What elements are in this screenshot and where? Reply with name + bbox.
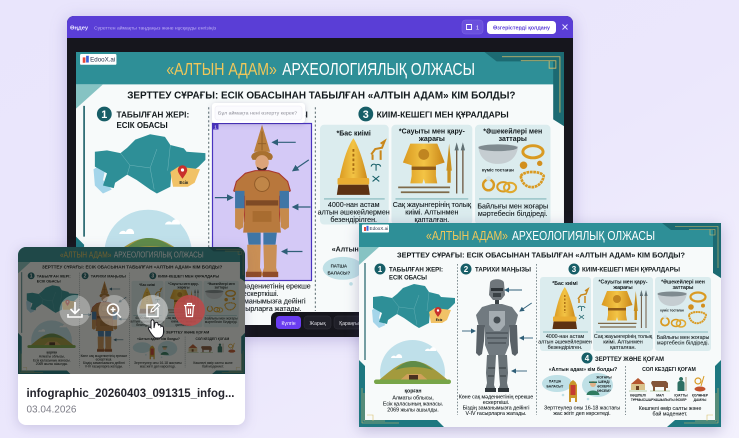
section 3: clothing cards: *Сауыты мен қару- (399, 129, 466, 136)
section 4: research and society: МАЛ (656, 394, 664, 398)
section 4: research and society (322, 246, 359, 286)
thumbnail image: Сақ жауынгерінің толық (165, 316, 202, 320)
icon: hand cursor (148, 320, 164, 338)
section 2: robot: ескерткіші. (483, 400, 509, 406)
panel: gallery card (18, 247, 245, 425)
section 3: clothing cards: қапталған. (610, 345, 636, 351)
editor header bar: Өзгерістерді қолдану (493, 26, 550, 32)
caption under warrior: V-IV ғасырларға жатады. (220, 305, 302, 313)
section 4: research and society: жас жігіт деп көрсетеді. (553, 411, 611, 417)
section 4: research and society: ЗЕРТТЕУ ЖӘНЕ ҚОҒАМ (394, 230, 487, 240)
section 2: robot: 2 (464, 265, 469, 274)
thumbnail image: жарағы (176, 285, 190, 289)
section 3: clothing cards: мәртебесін білдіреді. (657, 340, 709, 346)
editor header bar: Өңдеу (70, 26, 89, 32)
section 3: clothing cards: қапталған. (415, 216, 449, 224)
date: 03.04.2026 (26, 404, 77, 416)
section 2: robot: ТАРИХИ МАҢЫЗЫ (475, 266, 531, 274)
thumbnail image: ЕСІК ОБАСЫ (37, 278, 61, 283)
thumbnail image: V-IV ғасырларға жатады. (85, 364, 123, 368)
section 4: research and society: СОЛ КЕЗДЕГІ ҚОҒАМ (642, 367, 696, 373)
section 3: clothing cards: *Бас киімі (552, 281, 578, 287)
section 1: location: 2069 жылы ашылды. (387, 408, 439, 414)
section 1: location (372, 265, 455, 414)
section 4: research and society: «Алтын адам» кім болды? (549, 366, 617, 373)
section 2: warrior: 2 (217, 109, 223, 121)
research question: ЗЕРТТЕУ СҰРАҒЫ: ЕСІК ОБАСЫНАН ТАБЫЛҒАН «АЛТЫН АДАМ» КІМ БОЛДЫ? (127, 91, 515, 102)
caption under warrior (245, 282, 310, 312)
thumbnail image: қорған (46, 350, 57, 354)
section 3: clothing cards: безендірілген. (548, 345, 582, 351)
section 1: location: Есік (436, 318, 443, 322)
icon: delete (174, 295, 205, 326)
title: «АЛТЫН АДАМ» (166, 59, 277, 79)
section 3: clothing cards: Байлығы мен жоғары (657, 334, 709, 341)
section 3: clothing cards: КИІМ-КЕШЕГІ МЕН ҚҰРАЛДАРЫ (377, 109, 509, 119)
section 4: research and society: ЗЕРТТЕУ ЖӘНЕ ҚОҒАМ (595, 356, 664, 363)
thumbnail image: 3 (151, 274, 154, 280)
section 3: clothing cards: 3 (363, 109, 369, 121)
section 1: location: қорған (404, 388, 422, 394)
style button: dark (334, 316, 364, 329)
section 4: research and society: ТҰРМЫС (631, 398, 646, 402)
thumbnail image: Байлығы мен жоғары (205, 317, 238, 321)
icon: zoom (98, 295, 130, 326)
section 4: research and society: ӘСКЕРИ (597, 384, 611, 388)
caption under warrior: Біздің заманымызға дейінгі (216, 297, 306, 305)
section 3: clothing cards: *Әшекейлері мен (661, 278, 705, 286)
thumbnail image: «АЛТЫН АДАМ» (60, 251, 112, 260)
thumbnail image (18, 247, 245, 375)
thumbnail image: қапталған. (175, 323, 192, 327)
thumbnail image: Біздің заманымызға дейінгі (83, 361, 125, 365)
icon: download (60, 295, 90, 326)
infographic: main editor canvas (76, 52, 564, 327)
section 3: clothing cards: киімі. Алтынмен (405, 208, 459, 216)
section 1: location: ЕСІК ОБАСЫ (116, 120, 168, 130)
section 3: clothing cards: Сақ жауынгерінің толық (393, 201, 472, 209)
section 4: research and society: ШЕНДІ (598, 380, 610, 384)
thumbnail image: 2 (84, 274, 87, 280)
section 4: research and society: 4 (585, 354, 590, 363)
section 3: clothing cards: 4000-нан астам (546, 334, 585, 340)
section 2: robot (459, 265, 533, 417)
thumbnail image: киімі. Алтынмен (171, 320, 196, 324)
thumbnail image: 2069 жылы ашылды. (36, 362, 68, 366)
style button: light (304, 316, 331, 329)
section 2: robot: V-IV ғасырларға жатады. (466, 411, 526, 417)
thumbnail image: заттары (215, 285, 228, 289)
thumbnail image: *Сауыты мен қару- (168, 282, 199, 286)
section 3: clothing cards: 3 (572, 265, 577, 274)
section 4: research and society: ДАМУЫ (694, 398, 706, 402)
section 3: clothing cards: Байлығы мен жоғары (477, 202, 548, 210)
style toolbar (76, 312, 564, 337)
title: «АЛТЫН АДАМ» (426, 228, 508, 243)
section 3: clothing cards: алтын әшекейлермен (318, 208, 390, 216)
title (166, 63, 474, 78)
logo: EdooX.ai (370, 226, 388, 231)
section 1: location: Есік (179, 180, 189, 185)
section 1: location: 1 (378, 265, 383, 274)
thumbnail image: Көне сақ мәдениетінің ерекше (81, 354, 127, 358)
section 2: warrior (305, 112, 308, 118)
section 3: clothing cards: заттары (673, 285, 694, 291)
section 1: location (94, 110, 206, 247)
section 4: research and society: БАЛАСЫ? (547, 384, 563, 388)
logo: EdooX.ai (90, 57, 115, 64)
thumbnail image: ТАБЫЛҒАН ЖЕРІ: (37, 273, 71, 278)
section 2: robot: Көне сақ мәдениетінің ерекше (459, 394, 533, 400)
section 1: location: Алматы облысы, (392, 396, 434, 402)
infographic: result robot version (359, 223, 721, 427)
section 3: clothing cards: заттары (499, 136, 527, 143)
title (426, 228, 655, 243)
caption under warrior: ескерткіші. (243, 290, 279, 298)
thumbnail image: мәртебесін білдіреді. (205, 320, 237, 324)
thumbnail image: Көшпелі өмір салты және (193, 361, 233, 365)
section 3: clothing cards (318, 109, 548, 224)
section 3: clothing cards: мәртебесін білдіреді. (478, 210, 548, 218)
section 3: clothing cards (538, 265, 709, 351)
logo (80, 54, 116, 65)
style button: purple: Күлгін (281, 321, 296, 327)
thumbnail image: Зерттеулер оны 16-18 жастағы (134, 361, 182, 365)
thumbnail image: «Алтын адам» кім болды? (137, 337, 180, 341)
section 4: research and society: КӨШПЕЛІ (630, 394, 646, 398)
panel: editor window (67, 16, 573, 337)
section 3: clothing cards: КИІМ-КЕШЕГІ МЕН ҚҰРАЛДАРЫ (582, 266, 680, 274)
section 4: research and society: ПАТША (331, 264, 348, 269)
section 4: research and society: «Алтын адам» кім болды? (332, 246, 424, 254)
thumbnail image: безендірілген. (136, 323, 158, 327)
thumbnail image: СОЛ КЕЗДЕГІ ҚОҒАМ (196, 337, 229, 341)
section 3: clothing cards: 4000-нан астам (328, 201, 380, 209)
section 4: research and society: ҚУАТТЫ (674, 394, 688, 398)
section 3: clothing cards: *Сауыты мен қару- (599, 280, 648, 286)
section 4: research and society: Көшпелі өмір салты және (639, 406, 701, 412)
thumbnail image: 4000-нан астам (135, 316, 160, 320)
section 4: research and society: бай мәдениет. (653, 410, 687, 418)
editor header bar: Суреттен аймақты таңдаңыз және нұсқауды енгізіңіз (94, 24, 216, 30)
section 3: clothing cards: жарағы (612, 285, 633, 291)
logo (362, 224, 389, 232)
section 3: clothing cards: *Бас киімі (337, 130, 371, 138)
section 1: location: ЕСІК ОБАСЫ (389, 274, 427, 282)
thumbnail image: бай мәдениет. (202, 365, 224, 369)
icon: edit (137, 295, 168, 326)
editor header bar: 1 (476, 26, 479, 32)
thumbnail image: Есік қаласының жанасы. (33, 358, 71, 362)
file name: infographic_20260403_091315_infog... (26, 388, 234, 400)
selection region on the warrior: 1 (214, 124, 217, 130)
section 4: research and society: 4 (380, 229, 386, 241)
prompt popover (212, 103, 305, 123)
section 3: clothing cards: безендірілген. (330, 216, 377, 224)
section 3: clothing cards: күміс тостаған (482, 167, 514, 172)
thumbnail image: 4 (160, 330, 163, 336)
section 3: clothing cards: Сақ жауынгерінің толық (594, 334, 653, 340)
section 1: location: ТАБЫЛҒАН ЖЕРІ: (116, 109, 189, 119)
section 4: research and society: ӘСКЕР (675, 398, 687, 402)
section 4: research and society: ЖОҒАРЫ (595, 376, 612, 380)
section 4: research and society: ҚОЛӨНЕР (692, 394, 709, 398)
section 2: warrior: ТАРИХИ МАҢЫЗЫ (232, 109, 308, 119)
thumbnail image: КИІМ-КЕШЕГІ МЕН ҚҰРАЛДАРЫ (158, 273, 219, 278)
section 4: research and society: ПАТША (549, 380, 562, 384)
thumbnail image: Алматы облысы, (39, 355, 65, 359)
thumbnail image: *Әшекейлері мен (207, 282, 235, 286)
research question: ЗЕРТТЕУ СҰРАҒЫ: ЕСІК ОБАСЫНАН ТАБЫЛҒАН «АЛТЫН АДАМ» КІМ БОЛДЫ? (397, 250, 685, 260)
section 3: clothing cards: күміс тостаған (660, 308, 684, 312)
section 3: clothing cards: *Әшекейлері мен (483, 128, 542, 136)
selection region on the warrior (212, 124, 312, 280)
section 4: research and society: ШАРУАШЫЛЫҒЫ (645, 398, 675, 402)
section 4: research and society: КӨСЕМ? (597, 389, 611, 393)
thumbnail image: ТАРИХИ МАҢЫЗЫ (91, 273, 126, 278)
prompt popover: Бұл аймақта нені өзгерту керек? (218, 110, 298, 116)
thumbnail image: ЗЕРТТЕУ ЖӘНЕ ҚОҒАМ (166, 330, 210, 335)
section 3: clothing cards: алтын әшекейлермен (538, 338, 592, 346)
section 4: research and society: БАЛАСЫ? (327, 270, 351, 275)
title: АРХЕОЛОГИЯЛЫҚ ОЛЖАСЫ (282, 59, 475, 79)
thumbnail image: жас жігіт деп көрсетеді. (140, 364, 176, 368)
thumbnail image: 1 (30, 274, 33, 280)
caption under warrior: Көне сақ мәдениетінің ерекше (211, 283, 311, 291)
title: АРХЕОЛОГИЯЛЫҚ ОЛЖАСЫ (512, 228, 655, 243)
thumbnail image: ЗЕРТТЕУ СҰРАҒЫ: ЕСІК ОБАСЫНАН ТАБЫЛҒАН «АЛТЫН АДАМ» КІМ БОЛДЫ? (42, 265, 222, 271)
thumbnail image: *Бас киімі (139, 283, 155, 287)
section 2: robot: Біздің заманымызға дейінгі (463, 404, 529, 412)
section 1: location: ТАБЫЛҒАН ЖЕРІ: (389, 266, 443, 274)
section 3: clothing cards: жарағы (418, 136, 445, 143)
editor header bar (67, 16, 573, 38)
thumbnail image: ескерткіші. (96, 357, 112, 361)
section 3: clothing cards: киімі. Алтынмен (603, 340, 643, 346)
section 4: research and society: СОЛ КЕЗДЕГІ ҚОҒАМ (458, 247, 530, 254)
section 4: research and society: Зерттеулер оны 16-18 жастағы (544, 406, 620, 412)
style button: purple (276, 316, 301, 329)
style button: light: Жарық (309, 321, 326, 327)
style button: dark: Қараңғы (339, 321, 359, 327)
section 1: location: 1 (101, 109, 107, 121)
section 1: location: Есік қаласының жанасы. (383, 402, 443, 408)
thumbnail image: АРХЕОЛОГИЯЛЫҚ ОЛЖАСЫ (114, 251, 204, 260)
section 4: research and society (542, 354, 709, 418)
thumbnail image: алтын әшекейлермен (130, 320, 164, 324)
warrior figure (215, 125, 311, 277)
